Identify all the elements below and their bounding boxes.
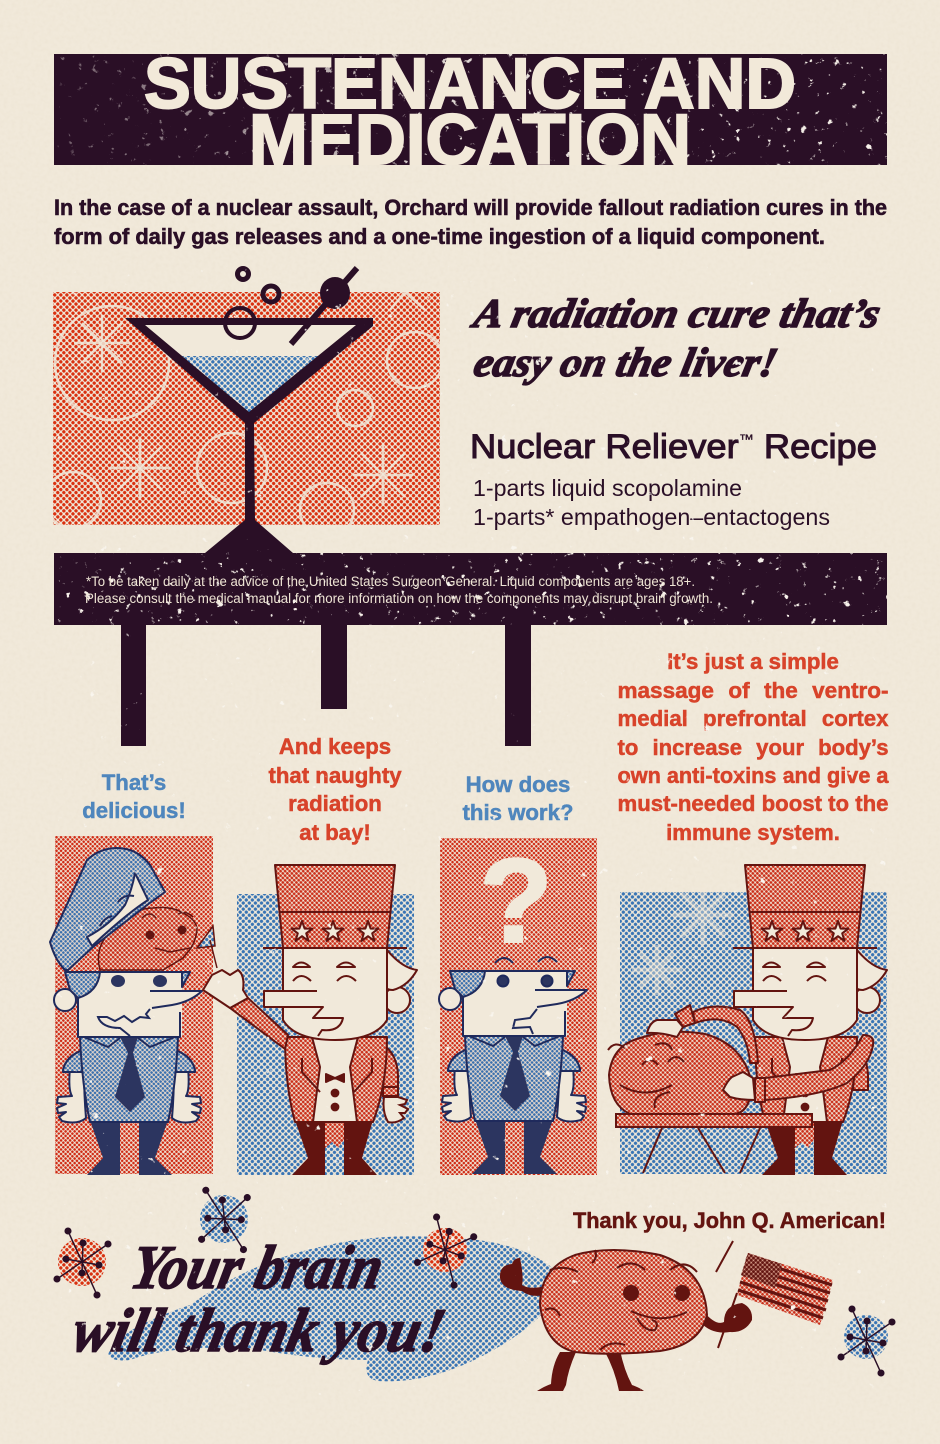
panel: uncle sam massaging brain — [608, 865, 887, 1175]
lower arm and hand — [723, 1035, 873, 1102]
footnote text — [85, 574, 713, 606]
blue background blob — [108, 1236, 558, 1381]
script slogan: will thank you! — [67, 1296, 452, 1365]
intro text: In the case of a nuclear assault, Orchard will provide fallout radiation cures in the — [54, 195, 887, 220]
script slogan: Your brain — [125, 1233, 390, 1302]
caption: naughty radiation: that naughty — [268, 763, 402, 788]
mascot arms — [500, 1258, 545, 1296]
recipe list: 1-parts* empathogen–entactogens — [473, 504, 830, 530]
mascot face — [545, 1250, 697, 1350]
caption: naughty radiation — [268, 734, 402, 845]
recipe list — [473, 475, 830, 530]
caption: explanation — [618, 649, 889, 845]
sam hand — [383, 1087, 408, 1122]
caption: explanation: own anti-toxins and give a — [618, 763, 889, 788]
recipe list: 1-parts liquid scopolamine — [473, 475, 742, 501]
faint stars on panel — [632, 885, 733, 995]
table — [616, 1114, 812, 1173]
caption: explanation: It’s just a simple — [667, 649, 839, 674]
title heading: SUSTENANCE AND — [144, 45, 796, 124]
intro text — [54, 195, 887, 249]
hair lid — [50, 848, 165, 970]
agent eyes — [111, 975, 167, 987]
exposed brain — [98, 908, 197, 970]
title heading — [144, 56, 794, 165]
script slogan — [67, 1233, 452, 1365]
recipe heading: Nuclear Reliever — [470, 428, 721, 466]
script headline: easy on the liver! — [470, 339, 782, 385]
starburst: blue right — [838, 1306, 895, 1376]
mascot legs — [537, 1350, 644, 1391]
panel: agent eating — [50, 836, 217, 1175]
caption: explanation: immune system. — [666, 820, 840, 845]
caption: explanation: to increase your body’s — [618, 735, 888, 760]
script headline: A radiation cure that’s — [467, 290, 885, 336]
caption: explanation: medial prefrontal cortex — [618, 706, 889, 731]
caption: how does this work: How does — [466, 772, 570, 797]
caption: how does this work: this work? — [463, 800, 573, 825]
panel: uncle sam feeding — [203, 865, 417, 1175]
thanks caption: Thank you, John Q. American! — [573, 1208, 886, 1233]
panel: martini halftone background — [45, 292, 443, 537]
caption: delicious: That’s — [102, 770, 166, 795]
recipe heading: ™ — [739, 431, 754, 447]
icon: martini glass — [125, 268, 373, 553]
mascot body — [540, 1250, 707, 1354]
flagpole — [716, 1241, 737, 1348]
script headline — [467, 290, 885, 385]
caption: naughty radiation: at bay! — [299, 820, 371, 845]
footnote text: Please consult the medical manual for more information on how the components may disrupt brain growth. — [85, 591, 713, 606]
caption: explanation: massage of the ventro- — [618, 678, 888, 703]
flag — [737, 1253, 833, 1325]
question mark: ? — [479, 834, 553, 968]
caption: explanation: must-needed boost to the — [618, 791, 888, 816]
starburst: red left — [54, 1228, 111, 1298]
caption: delicious — [82, 770, 186, 823]
starburst: red on blob — [411, 1212, 479, 1290]
title banner — [54, 54, 887, 165]
caption: delicious: delicious! — [82, 798, 186, 823]
panel: agent puzzled — [439, 834, 597, 1175]
massaged brain — [608, 1032, 752, 1114]
puzzled face — [495, 957, 557, 1034]
caption: naughty radiation: radiation — [288, 791, 382, 816]
caption: naughty radiation: And keeps — [279, 734, 391, 759]
tiny martini — [197, 926, 217, 968]
footnote bar and pipes — [54, 553, 887, 746]
upper arm over brain — [647, 1005, 758, 1063]
sam raised arm — [203, 970, 288, 1049]
agent mouth — [98, 1009, 150, 1036]
footnote text: *To be taken daily at the advice of the United States Surgeon General. Liquid components are ages 18+. — [86, 574, 695, 589]
title heading: MEDICATION — [249, 101, 691, 180]
starburst: blue top — [192, 1182, 258, 1258]
caption: how does this work — [463, 772, 573, 825]
distress speckle overlay — [54, 265, 887, 1395]
intro text: form of daily gas releases and a one-time ingestion of a liquid component. — [54, 224, 825, 249]
brain mascot — [500, 1241, 833, 1391]
recipe heading: Recipe — [754, 428, 877, 466]
